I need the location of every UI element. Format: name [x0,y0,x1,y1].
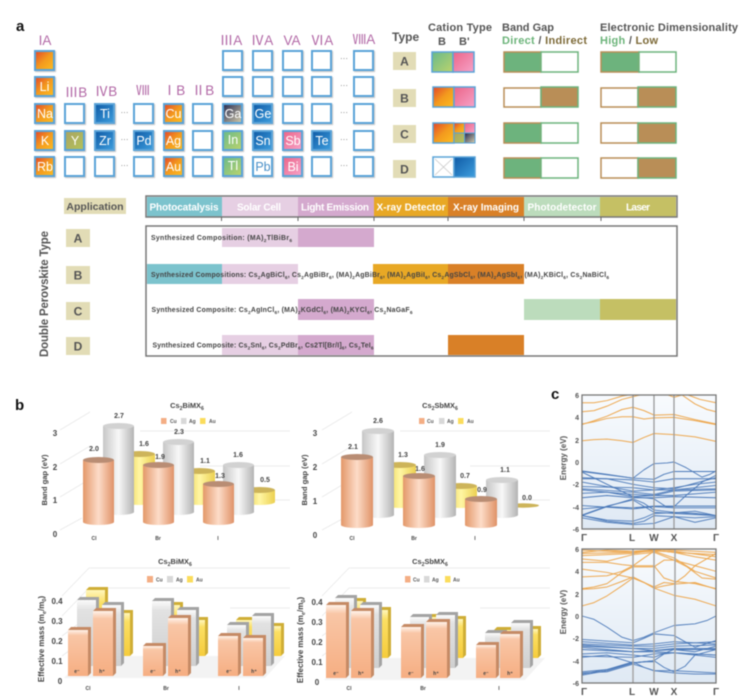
chart: Cs2BiMX6 band gap [40,401,290,542]
axis: 0.3 [51,617,63,626]
axis: 0 [53,530,58,539]
row labels [66,229,90,355]
axis [40,429,219,542]
application header bar [146,196,677,221]
blue element cells [95,104,331,150]
axis: -2 [573,636,579,643]
group headers: ⅣA [251,33,273,48]
mixed element cells: Y [71,134,80,148]
axis: 0 [575,614,579,621]
axis: X [671,687,678,698]
axis: Energy (eV) [559,589,568,634]
value labels: 0.7 [460,473,470,480]
group headers: ⅡB [192,83,214,98]
axis: I [217,536,219,542]
carrier labels: e⁻ [483,671,489,677]
axis: 6 [575,393,579,400]
chart: Cs2SbMX6 band gap [300,401,550,542]
chart: Cs2BiMX6 band gap: Cs2BiMX6 [170,401,204,412]
axis: 2 [575,438,579,445]
axis: Br [155,536,161,542]
axis: 1 [53,496,58,505]
orange element cells: Au [166,160,181,174]
legend: Ag [176,578,183,584]
blue element cells: Te [315,134,329,148]
axis: -4 [573,505,579,512]
application header bar: Solar Cell [237,202,281,214]
electronic dimensionality column [600,22,739,178]
ellipsis dots: ··· [120,108,128,117]
application header bar: X-ray Imaging [453,202,519,214]
cation type column: Cation Type [428,22,492,34]
legend: Ag [447,419,454,425]
axis: Effective mass (me/m0) [37,596,48,682]
axis: 0 [313,531,318,540]
axis: 0.4 [51,597,63,606]
ellipsis dots: ··· [340,54,348,63]
chart: band structure bottom [559,547,719,698]
carrier labels: h⁺ [251,669,257,675]
axis: 0 [58,677,63,686]
value labels: 0.9 [477,487,487,494]
value labels: 1.6 [233,452,243,459]
carrier labels: e⁻ [74,669,80,675]
blue element cells: Pd [136,134,152,148]
axis: 4 [575,569,579,576]
type column: A [400,54,409,68]
carrier labels: h⁺ [99,669,105,675]
axis: I [498,686,500,692]
axis: X [671,533,678,544]
legend: Au [467,419,474,425]
group headers: ⅢA [220,33,242,48]
value labels: 0.0 [522,495,532,502]
type column: B [400,92,409,106]
Ag bars [335,595,533,668]
application bands [147,228,676,355]
Ag bars [77,597,274,666]
axis: -2 [573,482,579,489]
row labels: A [74,232,83,246]
row labels: B [74,268,83,282]
legend: Cu [427,419,434,425]
panel label c: c [551,386,559,403]
vertical axis title: Double Perovskite Type [39,231,51,357]
axis: 2 [575,592,579,599]
chart: Cs2SbMX6 effective mass [296,557,550,692]
value labels: 1.9 [435,442,445,449]
carrier labels: e⁻ [408,671,414,677]
carrier labels: h⁺ [175,669,181,675]
application header bar: Laser [626,202,650,214]
cation type column [428,22,492,177]
axis: -4 [573,659,579,666]
axis: L [629,533,635,544]
panel: application matrix [39,196,677,357]
blue element cells: Ge [255,107,271,121]
legend: Au [196,578,203,584]
value labels: 2.0 [89,446,99,453]
value labels: 1.6 [139,441,149,448]
carrier labels: h⁺ [433,671,439,677]
group headers: ⅢB [65,85,87,100]
axis: -6 [573,681,579,688]
axis: Cl [92,536,97,542]
axis [559,393,719,544]
axis [37,596,240,692]
orange element cells: Rb [37,160,53,174]
type column: Type [392,30,419,44]
axis: 0.1 [311,658,323,667]
axis: I [474,536,476,542]
band gap column: Direct / Indirect [502,35,587,47]
axis: Cl [350,536,355,542]
conduction bands [582,550,716,606]
orange element cells: Cu [166,107,182,121]
axis: 0.2 [311,638,323,647]
value labels: 1.6 [415,466,425,473]
value labels [348,418,532,502]
mixed element cells: Bi [287,160,299,174]
group headers [39,32,375,100]
axis: Effective mass (me/m0) [296,597,306,683]
matrix frame [146,226,677,356]
orange element cells: K [41,134,50,148]
legend [147,576,203,584]
legend: Cu [170,419,177,425]
axis: 0.3 [311,618,323,627]
Au cylinders [384,462,539,508]
axis [296,597,500,692]
axis: 0 [315,678,320,687]
group headers: ⅧA [353,32,375,47]
mixed element cells: Tl [228,159,238,173]
axis: Band gap (eV) [40,454,49,506]
group headers: VA [283,33,301,48]
electronic dimensionality column: Electronic Dimensionality [600,22,739,34]
valence bands [582,616,716,675]
ellipsis dots [120,54,348,170]
panel: periodic table [35,32,375,176]
value labels: 2.3 [174,429,184,436]
axis: 4 [575,415,579,422]
value labels: 2.6 [373,418,383,425]
axis: 2 [313,463,318,472]
axis: Cl [86,686,91,692]
blue element cells: Zr [99,134,111,148]
Cu bars [326,602,523,678]
axis: 6 [575,547,579,554]
axis: 0.4 [311,598,323,607]
value labels [89,413,270,484]
axis: Γ [581,687,587,698]
carrier labels: h⁺ [358,671,364,677]
Au bars [86,587,284,656]
chart: Cs2SbMX6 effective mass: Cs2SbMX6 [412,557,448,568]
axis: 3 [313,429,318,438]
type column: D [400,162,409,176]
application header bar: Light Emission [301,202,369,214]
legend: Au [209,419,216,425]
group headers: ⅥA [311,33,333,48]
Ag cylinders [362,428,518,518]
mixed element cells: In [228,133,238,147]
chart: Cs2BiMX6 effective mass [37,557,290,692]
axis: L [629,687,635,698]
composition text B: Synthesized Compositions: Cs2AgBiCl6, Cs2AgBiBr6, (MA)2AgBiBr6, (MA)2AgBiI6, Cs2AgSbCl6, (MA)2AgSbI6, (MA)2KBiCl6, Cs2NaBiCl6 [151,272,609,280]
application header bar: Photodetector [528,202,597,214]
axis: Energy (eV) [559,435,568,480]
axis: Br [411,536,417,542]
band gap column: Band Gap [502,22,554,34]
axis: Band gap (eV) [300,454,309,506]
cation type column: B' [459,36,470,48]
ellipsis dots: ··· [340,81,348,90]
carrier labels: e⁻ [150,669,156,675]
axis: I [238,686,240,692]
carrier labels [333,671,513,677]
carrier labels: h⁺ [507,671,513,677]
value labels: 1.3 [398,452,408,459]
valence bands [582,462,716,525]
axis: Γ [713,687,719,698]
legend: Au [453,578,460,584]
chart: Cs2SbMX6 band gap: Cs2SbMX6 [422,401,458,412]
chart: band structure top [559,393,719,544]
type column: C [400,128,409,142]
application label [64,198,126,214]
mixed element cells [65,104,302,176]
legend [419,418,474,425]
Au cylinders [124,451,275,505]
legend: Cu [156,578,163,584]
Cu bars [68,608,266,676]
panel label a: a [16,18,25,35]
ellipsis dots: ··· [340,161,348,170]
Ag cylinders [103,423,254,515]
mixed element cells: Ga [225,107,241,121]
axis: 0.1 [51,657,63,666]
value labels: 1.1 [500,467,510,474]
legend: Cu [413,578,420,584]
mixed element cells: Pb [255,160,271,174]
value labels: 2.7 [114,413,124,420]
chart: Cs2BiMX6 effective mass: Cs2BiMX6 [158,557,192,568]
legend [405,576,460,584]
cation type column: B [438,36,446,48]
ellipsis dots: ··· [120,161,128,170]
value labels: 0.5 [260,477,270,484]
value labels: 1.1 [200,458,210,465]
carrier labels: e⁻ [333,671,339,677]
axis: Γ [581,533,587,544]
application header bar: X-ray Detector [376,202,446,214]
orange element cells [35,51,183,176]
empty element cells [65,51,373,176]
band gap column [502,22,587,178]
axis: Cl [346,686,352,692]
panel label b: b [15,397,24,414]
carrier labels: e⁻ [226,669,232,675]
group headers: IA [39,33,51,48]
composition text A: Synthesized Composition: (MA)2TlBiBr6 [151,235,292,244]
orange element cells: Li [40,80,49,94]
axis: -6 [573,527,579,534]
value labels: 2.1 [348,444,358,451]
ellipsis dots: ··· [340,108,348,117]
legend [161,418,216,425]
legend: Ag [432,578,439,584]
orange element cells: Na [37,107,53,121]
axis: 0 [575,460,579,467]
carrier labels [74,669,257,675]
blue element cells: Ti [100,107,110,121]
axis: W [649,533,659,544]
application label: Application [66,201,124,213]
composition text C: Synthesized Composite: Cs2AgInCl6, (MA)2KGdCl6, (MA)2KYCl6, Cs2NaGaF6 [152,307,413,316]
axis: 0.2 [51,637,63,646]
Au bars [344,598,541,658]
Cu cylinders [83,457,234,525]
group headers: ⅣB [95,84,117,99]
ellipsis dots: ··· [340,135,348,144]
Cu cylinders [341,454,497,528]
axis: 2 [53,463,58,472]
mixed element cells: Sb [285,134,301,148]
panel: type legend table [392,22,739,178]
group headers: ⅠB [163,83,185,98]
legend: Ag [189,419,196,425]
axis: Γ [713,533,719,544]
value labels: 1.9 [155,454,165,461]
row labels: C [74,304,83,318]
orange element cells: Ag [166,134,181,148]
row labels: D [74,340,83,354]
value labels: 1.3 [215,473,225,480]
type column [392,30,419,178]
axis [300,429,476,542]
electronic dimensionality column: High / Low [600,35,658,47]
conduction bands [582,395,716,442]
axis: Br [163,686,169,692]
composition text D: Synthesized Composite: Cs2SnI6, Cs2PdBr6, Cs2Tl[Br/I]6, Cs2TeI6 [152,342,374,351]
application header bar: Photocatalysis [150,202,219,214]
blue element cells: Sn [255,134,271,148]
axis: 3 [53,429,58,438]
axis: W [649,687,659,698]
axis: Br [420,686,426,692]
group headers: Ⅷ [136,83,150,98]
ellipsis dots: ··· [120,135,128,144]
axis [559,547,719,698]
axis: 1 [313,497,318,506]
